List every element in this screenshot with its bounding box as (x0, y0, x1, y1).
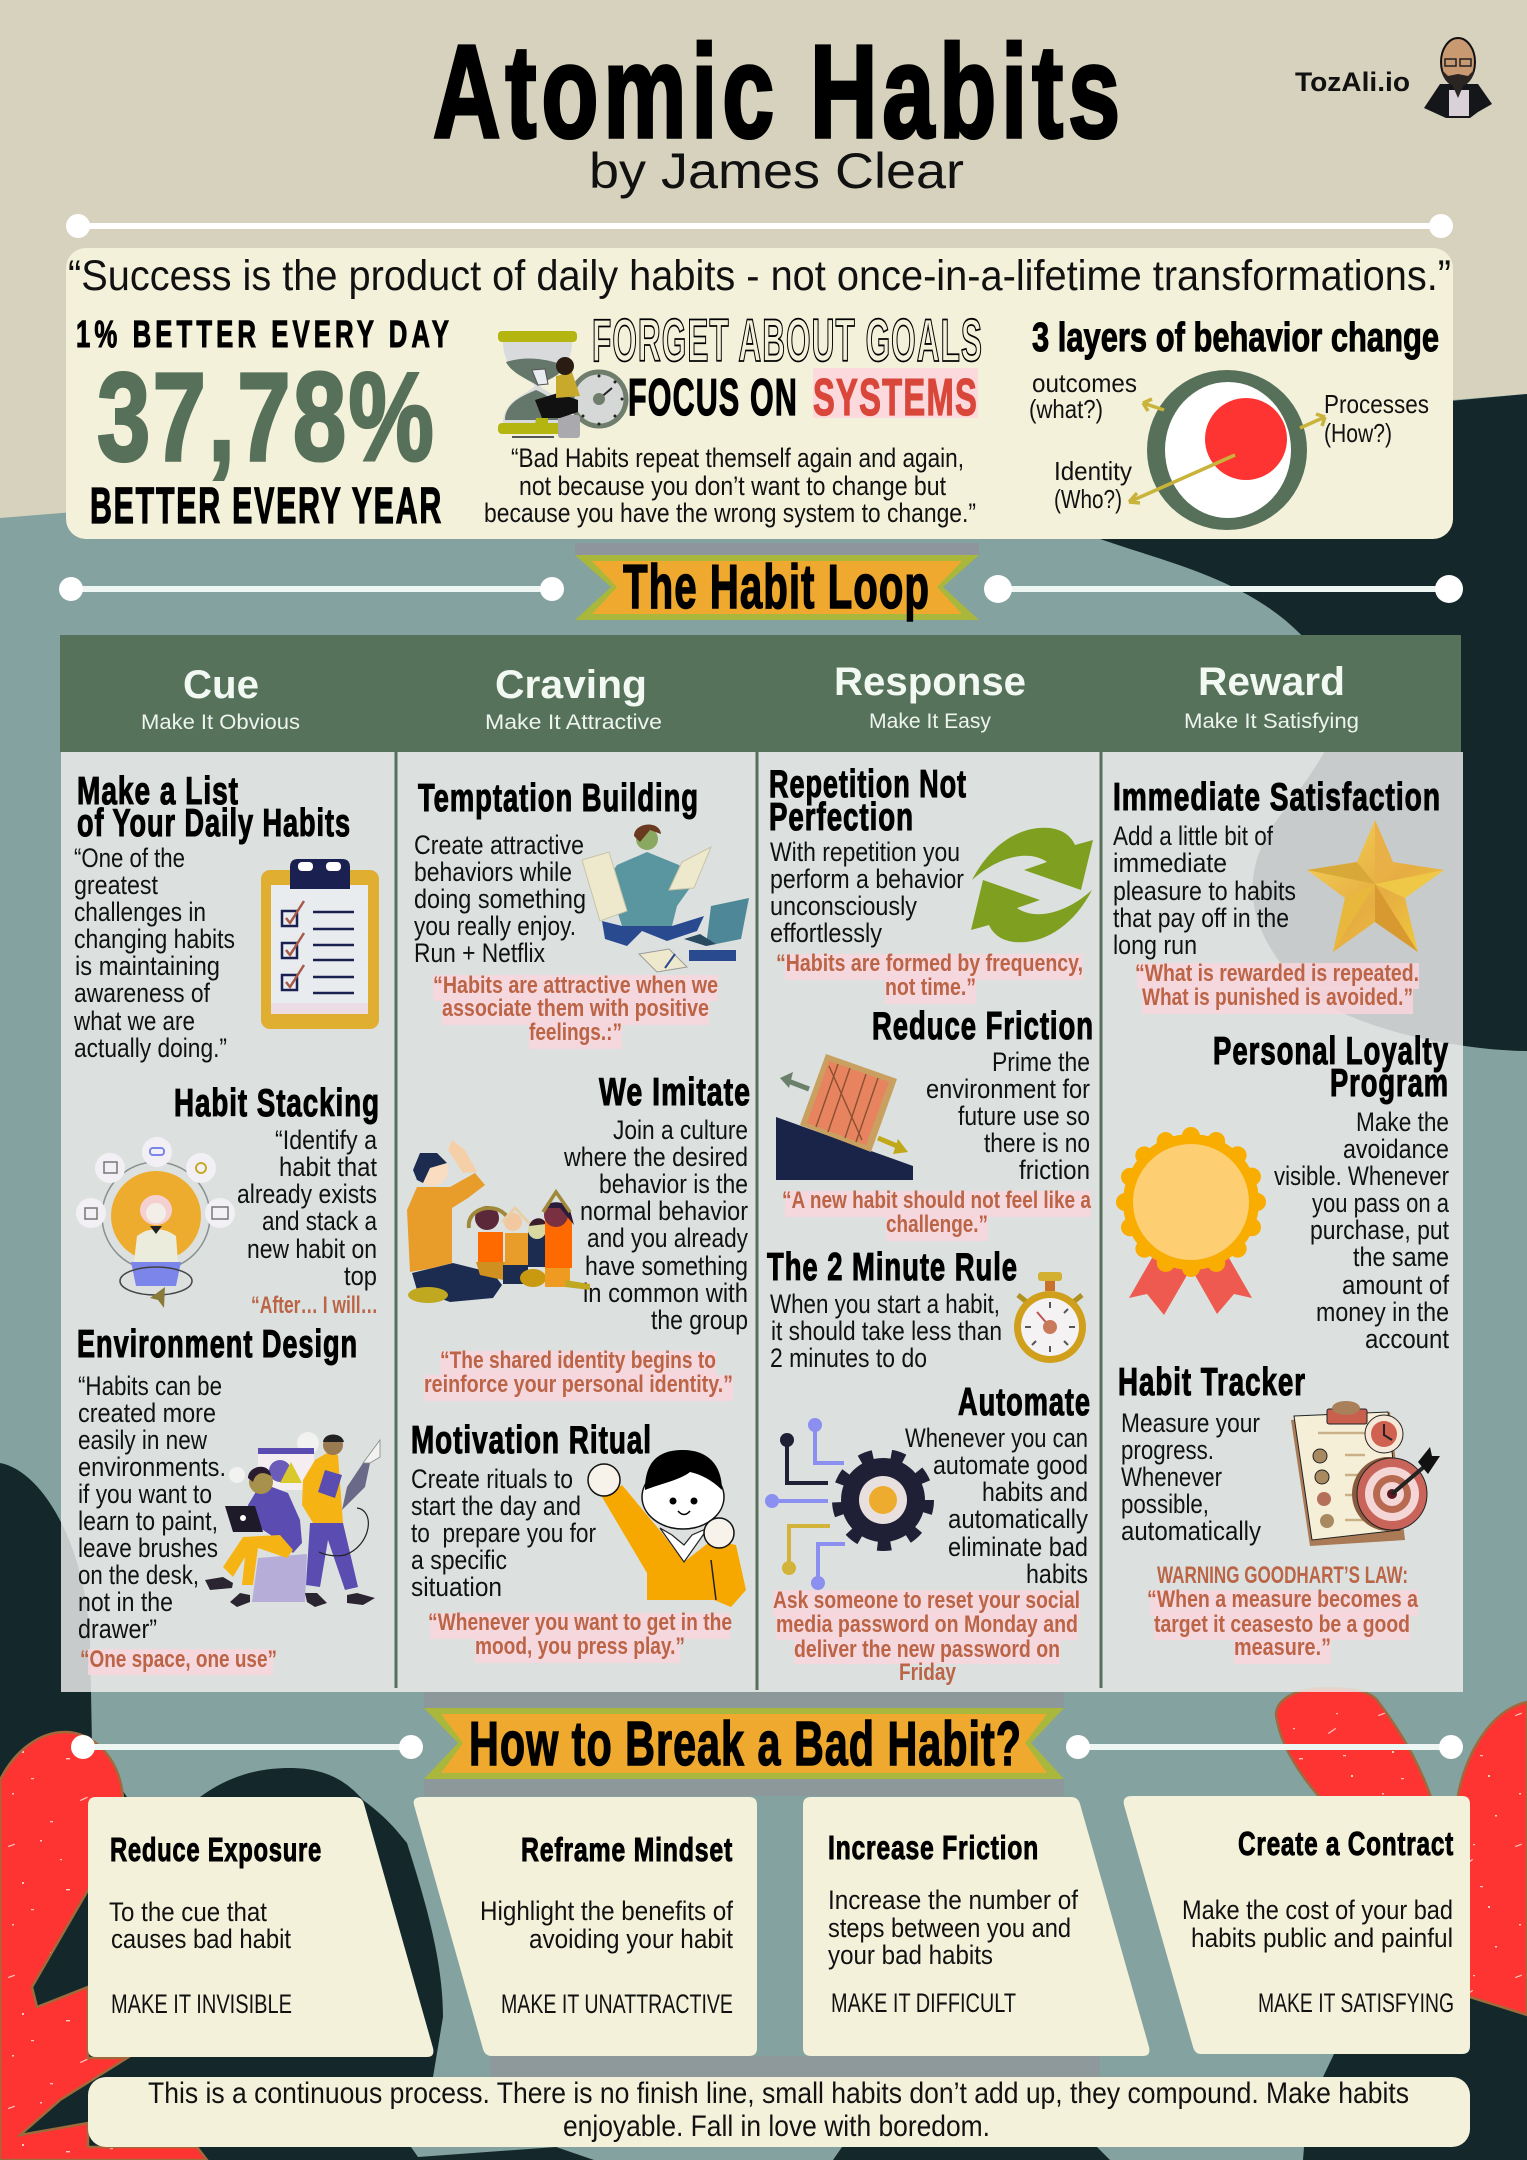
label: identity: (Who?) (1054, 484, 1122, 514)
illustration: two people in new environment (205, 1432, 380, 1607)
text: motivation ritual: situation (411, 1572, 502, 1602)
text: we imitate: where the desired (563, 1142, 748, 1172)
heading: reduce friction: Reduce Friction (872, 1005, 1094, 1048)
text: motivation ritual: Create rituals to (411, 1464, 573, 1494)
heading: temptation building: Temptation Building (418, 777, 699, 820)
quote: goodhart's law: measure.” (1234, 1634, 1331, 1661)
text: make a list: changing habits (74, 924, 235, 954)
stat: 37,78%: 37,78% (97, 348, 436, 487)
text: habit stacking: “Identify a (275, 1125, 378, 1155)
text: personal loyalty: avoidance (1343, 1134, 1449, 1164)
text: reduce friction (926, 1047, 1090, 1185)
arrow: processes (1300, 414, 1325, 428)
text: we imitate: in common with (583, 1278, 748, 1308)
quote: shared identity: “The shared identity begins to (440, 1347, 716, 1374)
quote: reset password: Friday (899, 1659, 957, 1686)
text: motivation ritual: a specific (411, 1545, 507, 1575)
text: habit tracker (1121, 1408, 1261, 1546)
text: immediate satisfaction (1113, 821, 1296, 960)
icon: habit tracker clipboard and target (1291, 1401, 1440, 1546)
quote: goodhart's law: “When a measure becomes a (1147, 1586, 1419, 1613)
text: environment design (78, 1371, 226, 1644)
text: environment design: if you want to (78, 1479, 212, 1509)
arrow: outcomes (1143, 399, 1164, 411)
text: habit stacking: and stack a (262, 1206, 378, 1236)
heading: systems: SYSTEMS (813, 369, 978, 427)
heading: repetition not perfection: Repetition Not (769, 763, 967, 806)
heading: personal loyalty program (1213, 1030, 1449, 1105)
text: temptation building: Run + Netflix (414, 938, 545, 968)
text: temptation building: doing something (414, 884, 586, 914)
text: reduce friction: environment for (926, 1074, 1090, 1104)
illustration: crate on slope (776, 1054, 913, 1180)
text: personal loyalty: money in the (1316, 1297, 1449, 1327)
illustration: man and children (407, 1140, 590, 1303)
text: environment design: learn to paint, (78, 1506, 218, 1536)
quote: reset password (773, 1587, 1080, 1686)
text: make a list: awareness of (74, 978, 210, 1008)
stat label: BETTER EVERY YEAR (90, 477, 443, 534)
text: automate: habits and (982, 1477, 1088, 1507)
logo text: TozAli.io (1295, 67, 1410, 97)
quote: habits are attractive (433, 972, 718, 1049)
header: craving: Make It Attractive (485, 711, 662, 734)
text: automate: automatically (948, 1504, 1088, 1534)
text: reduce friction: there is no (984, 1128, 1090, 1158)
text: motivation ritual (411, 1464, 596, 1602)
text: habit stacking: top (344, 1261, 377, 1291)
quote: shared identity: reinforce your personal identity.” (424, 1371, 733, 1398)
text: we imitate: the group (651, 1305, 748, 1335)
card: reframe mindset: Highlight the benefits of (480, 1896, 733, 1926)
text: make a list: actually doing.” (74, 1033, 227, 1063)
text: automate: automate good (933, 1450, 1088, 1480)
banner: the habit loop (575, 553, 979, 622)
stat: 1 percent heading: 1% BETTER EVERY DAY (76, 314, 453, 356)
header: reward (1184, 660, 1359, 733)
text: repetition (770, 837, 964, 948)
label: outcomes: outcomes (1032, 368, 1137, 398)
card: increase friction: Increase the number of (828, 1885, 1078, 1915)
card: create a contract: MAKE IT SATISFYING (1258, 1988, 1454, 2018)
text: habit tracker: possible, (1121, 1489, 1209, 1519)
text: personal loyalty: you pass on a (1312, 1188, 1450, 1218)
illustration: person reading with laptop (582, 824, 749, 972)
icon: author avatar (1424, 38, 1492, 118)
banner: the habit loop: The Habit Loop (623, 553, 930, 622)
text: automate (905, 1423, 1088, 1589)
icon: recycle arrows (971, 828, 1093, 942)
quote: reset password: Ask someone to reset your social (773, 1587, 1080, 1614)
title: Atomic Habits (433, 18, 1125, 165)
card: reframe mindset: Reframe Mindset (521, 1831, 733, 1868)
text: we imitate: behavior is the (599, 1169, 748, 1199)
card: increase friction (803, 1797, 1149, 2056)
quote: frequency: not time.” (885, 974, 976, 1001)
text: reduce friction: Prime the (992, 1047, 1090, 1077)
text: bad habits quote: “Bad Habits repeat themself again and again, (511, 443, 964, 473)
text: automate: eliminate bad (948, 1532, 1088, 1562)
text: make a list (73, 843, 235, 1063)
heading: systems (813, 368, 978, 427)
text: immediate satisfaction: pleasure to habits (1113, 876, 1296, 906)
chart: target circles (1147, 370, 1307, 530)
text: habit stacking (237, 1125, 378, 1291)
text: 2 minute rule: it should take less than (771, 1316, 1002, 1346)
text: habit stacking: new habit on (247, 1234, 377, 1264)
quote: whenever you want: mood, you press play.” (475, 1633, 685, 1660)
quote: whenever you want (428, 1609, 732, 1663)
quote: frequency: “Habits are formed by frequency, (776, 950, 1083, 977)
text: we imitate: Join a culture (613, 1115, 748, 1145)
top divider (66, 214, 1453, 238)
text: motivation ritual: start the day and (411, 1491, 581, 1521)
heading: we imitate: We Imitate (599, 1071, 751, 1114)
header band (60, 635, 1461, 752)
heading: personal loyalty program: Program (1330, 1062, 1449, 1105)
card: reduce exposure: causes bad habit (111, 1924, 291, 1954)
card: increase friction: Increase Friction (828, 1829, 1039, 1866)
banner: how to break a bad habit: How to Break a Bad Habit? (469, 1710, 1022, 1779)
label: processes (1324, 389, 1429, 448)
text: personal loyalty (1274, 1107, 1450, 1354)
label: processes: Processes (1324, 389, 1429, 419)
heading: forget about goals: FORGET ABOUT GOALS (592, 307, 983, 374)
quote: rewarded repeated (1135, 960, 1419, 1014)
heading: repetition not perfection: Perfection (769, 796, 914, 839)
card: reframe mindset (414, 1797, 757, 2056)
text: we imitate: have something (585, 1251, 748, 1281)
card: increase friction: steps between you and (828, 1913, 1071, 1943)
label: outcomes: (what?) (1029, 394, 1103, 424)
text: immediate satisfaction: Add a little bit of (1113, 821, 1273, 851)
text: repetition: effortlessly (770, 918, 882, 948)
quote: habits are attractive: “Habits are attractive when we (433, 972, 718, 999)
icon: stopwatch (1014, 1272, 1086, 1363)
card: increase friction: MAKE IT DIFFICULT (831, 1988, 1016, 2018)
text: 2 minute rule (770, 1289, 1002, 1373)
quote: reset password: deliver the new password on (794, 1636, 1060, 1663)
text: immediate satisfaction: long run (1113, 930, 1197, 960)
quote: goodhart's law: WARNING GOODHART’S LAW: (1157, 1562, 1408, 1589)
header: response (834, 660, 1026, 733)
text: temptation building (414, 830, 586, 968)
header: response: Make It Easy (869, 710, 991, 733)
label: outcomes (1029, 368, 1137, 424)
heading: repetition not perfection (769, 763, 967, 839)
text: 2 minute rule: When you start a habit, (770, 1289, 1000, 1319)
text: environment design: not in the (78, 1587, 173, 1617)
text: make a list: greatest (74, 870, 158, 900)
text: habit tracker: progress. (1121, 1435, 1214, 1465)
text: environment design: created more (78, 1398, 216, 1428)
header: cue: Cue (183, 663, 259, 707)
divider: habit loop left (59, 577, 564, 601)
heading: 2 minute rule: The 2 Minute Rule (767, 1246, 1018, 1289)
icon: hourglass and clock (498, 331, 626, 438)
text: immediate satisfaction: that pay off in the (1113, 903, 1289, 933)
heading: make a list: Make a List (77, 770, 239, 813)
text: personal loyalty: purchase, put (1310, 1215, 1449, 1245)
text: bad habits quote: not because you don’t want to change but (519, 471, 946, 501)
text: environment design: on the desk, (78, 1560, 199, 1590)
quote: new habit: “A new habit should not feel like a (782, 1187, 1092, 1214)
icon: person with habits ring (76, 1137, 235, 1308)
icon: medal (1123, 1134, 1259, 1315)
text: we imitate: normal behavior (580, 1196, 748, 1226)
text: environment design: drawer” (78, 1614, 157, 1644)
quote: goodhart's law: target it ceasesto be a good (1154, 1611, 1410, 1638)
arrow: identity (1129, 455, 1235, 503)
text: personal loyalty: the same (1353, 1242, 1449, 1272)
card: create a contract (1124, 1796, 1470, 2054)
card: create a contract: habits public and painful (1191, 1923, 1453, 1953)
text: make a list: what we are (73, 1006, 195, 1036)
quote: habits are attractive: associate them with positive (442, 995, 709, 1022)
heading: habit tracker: Habit Tracker (1118, 1361, 1306, 1404)
heading: make a list: of Your Daily Habits (77, 802, 351, 845)
quote: reset password: media password on Monday and (776, 1611, 1078, 1638)
subtitle: by James Clear (589, 143, 964, 199)
card: reframe mindset: avoiding your habit (529, 1924, 733, 1954)
card: create a contract: Create a Contract (1238, 1825, 1454, 1862)
text: habit stacking: already exists (237, 1179, 377, 1209)
text: repetition: perform a behavior (770, 864, 964, 894)
text: personal loyalty: amount of (1342, 1270, 1449, 1300)
text: motivation ritual: to prepare you for (411, 1518, 596, 1548)
header: reward: Reward (1198, 660, 1345, 704)
card: reframe mindset: MAKE IT UNATTRACTIVE (501, 1989, 733, 2019)
text: habit tracker: Measure your (1121, 1408, 1260, 1438)
card: increase friction: your bad habits (828, 1940, 993, 1970)
text: we imitate: and you already (587, 1223, 748, 1253)
panel: habit loop table (60, 635, 1463, 1692)
text: personal loyalty: Make the (1356, 1107, 1449, 1137)
footer note: enjoyable. Fall in love with boredom. (563, 2110, 990, 2143)
divider: bad habit left (71, 1735, 423, 1759)
text: habit stacking: habit that (279, 1152, 377, 1182)
text: environment design: easily in new (78, 1425, 207, 1455)
quote: rewarded repeated: “What is rewarded is repeated. (1135, 960, 1419, 987)
quote: whenever you want: “Whenever you want to get in the (428, 1609, 732, 1636)
quote: frequency (776, 950, 1083, 1004)
card: reduce exposure: MAKE IT INVISIBLE (111, 1989, 292, 2019)
text: environment design: “Habits can be (78, 1371, 222, 1401)
card: reduce exposure: Reduce Exposure (110, 1831, 322, 1868)
text: reduce friction: friction (1019, 1155, 1090, 1185)
icon: gold star (1307, 820, 1444, 952)
heading: automate: Automate (958, 1381, 1091, 1424)
panel: intro summary (66, 248, 1453, 539)
quote: rewarded repeated: What is punished is avoided.” (1142, 984, 1413, 1011)
banner: how to break a bad habit (424, 1708, 1064, 1779)
card: reduce exposure: To the cue that (109, 1897, 267, 1927)
icon: clipboard checklist (261, 859, 379, 1029)
header: craving: Craving (495, 663, 647, 707)
heading: motivation ritual: Motivation Ritual (411, 1419, 652, 1462)
text: make a list: “One of the (74, 843, 185, 873)
text: personal loyalty: account (1365, 1324, 1449, 1354)
icon: gear and circuit (765, 1418, 927, 1590)
quote: goodhart's law (1147, 1562, 1419, 1664)
quote: after I will: “After… I will… (251, 1292, 378, 1319)
text: temptation building: behaviors while (414, 857, 572, 887)
text: habit tracker: automatically (1121, 1516, 1261, 1546)
quote: new habit: challenge.” (886, 1211, 988, 1238)
header: cue: Make It Obvious (141, 711, 300, 734)
quote: new habit (782, 1187, 1092, 1241)
heading: habit stacking: Habit Stacking (174, 1082, 380, 1125)
text: repetition: unconsciously (770, 891, 917, 921)
text: environment design: environments. (78, 1452, 226, 1482)
heading: focus on: FOCUS ON (628, 369, 798, 427)
divider: bad habit right (1066, 1735, 1463, 1759)
header: cue (141, 663, 300, 734)
quote: shared identity (424, 1347, 733, 1401)
header: response: Response (834, 660, 1026, 704)
text: habit tracker: Whenever (1121, 1462, 1222, 1492)
text: automate: habits (1026, 1559, 1088, 1589)
text: bad habits quote (484, 443, 976, 528)
text: make a list: challenges in (74, 897, 206, 927)
header: reward: Make It Satisfying (1184, 710, 1359, 733)
label: processes: (How?) (1324, 418, 1392, 448)
text: automate: Whenever you can (905, 1423, 1088, 1453)
text: immediate satisfaction: immediate (1113, 848, 1227, 878)
card: create a contract: Make the cost of your bad (1182, 1895, 1453, 1925)
quote: one space one use: “One space, one use” (80, 1646, 277, 1673)
text: personal loyalty: visible. Whenever (1274, 1161, 1449, 1191)
text: repetition: With repetition you (770, 837, 960, 867)
heading: environment design: Environment Design (77, 1323, 358, 1366)
text: environment design: leave brushes (78, 1533, 218, 1563)
text: 2 minute rule: 2 minutes to do (770, 1343, 927, 1373)
text: bad habits quote: because you have the wrong system to change.” (484, 498, 976, 528)
illustration: boy cheering (588, 1450, 746, 1607)
text: temptation building: you really enjoy. (414, 911, 576, 941)
text: reduce friction: future use so (958, 1101, 1090, 1131)
divider: habit loop right (984, 575, 1463, 603)
quote: habits are attractive: feelings.:” (529, 1019, 622, 1046)
label: identity: Identity (1054, 456, 1132, 486)
heading: make a list (77, 770, 351, 845)
quote: “Success is the product of daily habits - not once-in-a-lifetime transformations.” (68, 252, 1451, 300)
text: make a list: is maintaining (75, 951, 220, 981)
card: reduce exposure (88, 1797, 433, 2057)
text: we imitate (563, 1115, 748, 1335)
label: identity (1054, 456, 1132, 514)
footer note (88, 2077, 1470, 2147)
text: temptation building: Create attractive (414, 830, 584, 860)
header: craving (485, 663, 662, 734)
